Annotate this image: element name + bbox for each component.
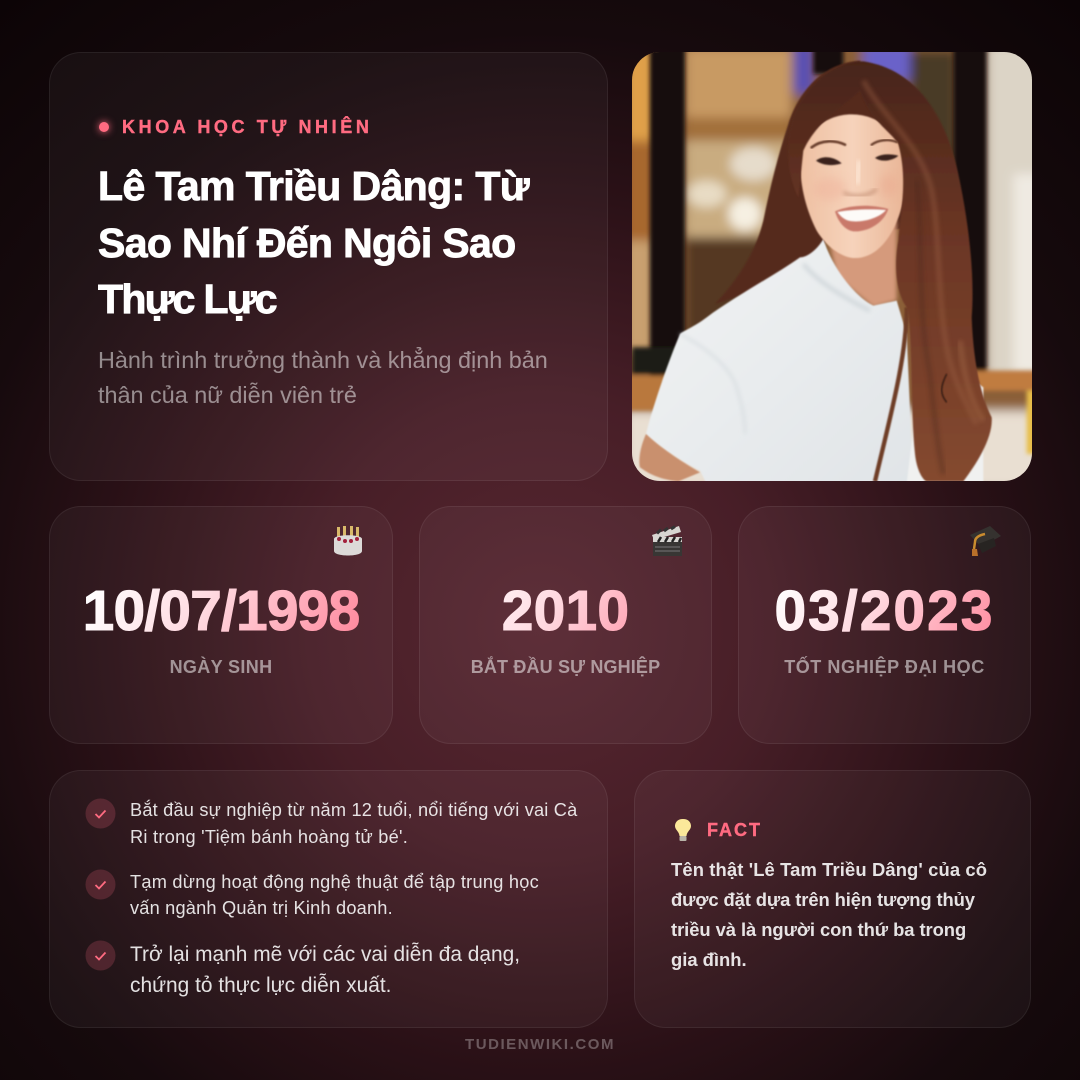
subtitle — [98, 347, 548, 408]
bullet 3: chứng tỏ thực lực diễn xuất. — [130, 974, 391, 997]
stat value: career start — [419, 579, 712, 643]
fact text: gia đình. — [671, 949, 747, 970]
neck — [827, 221, 897, 307]
fact text: Tên thật 'Lê Tam Triều Dâng' của cô — [671, 859, 987, 880]
bullet 1: Bắt đầu sự nghiệp từ năm 12 tuổi, nổi tiếng với vai Cà — [130, 800, 577, 820]
bullet 1: Ri trong 'Tiệm bánh hoàng tử bé'. — [130, 827, 408, 847]
panel: birth date stat — [49, 506, 393, 744]
shirt — [646, 239, 913, 484]
icon: check — [86, 870, 116, 900]
fact heading: FACT — [707, 820, 762, 840]
stat label: graduation: TỐT NGHIỆP ĐẠI HỌC — [784, 657, 985, 677]
panel: fact — [634, 770, 1031, 1028]
fact text — [671, 859, 987, 970]
mouth — [835, 206, 888, 231]
title: Lê Tam Triều Dâng: Từ — [98, 163, 529, 209]
panel: title card — [49, 52, 608, 481]
bullet 2: Tạm dừng hoạt động nghệ thuật để tập trung học — [130, 872, 539, 892]
hair behind — [715, 61, 913, 304]
bullet 3: Trở lại mạnh mẽ với các vai diễn đa dạng, — [130, 943, 520, 966]
footer brand: TUDIENWIKI.COM — [465, 1036, 615, 1053]
icon: check — [86, 940, 116, 970]
hair top and long right side — [788, 61, 992, 481]
icon: clapperboard — [652, 526, 682, 556]
panel: career start stat — [419, 506, 712, 744]
title — [98, 163, 530, 322]
arm — [639, 434, 700, 481]
brows — [812, 141, 845, 147]
fact text: được đặt dựa trên hiện tượng thủy — [671, 889, 975, 910]
stat label: birth date: NGÀY SINH — [170, 657, 272, 677]
icon: light bulb — [675, 819, 691, 841]
photo: smiling actress in white shirt — [632, 52, 1032, 481]
face — [800, 114, 905, 258]
category tag: KHOA HỌC TỰ NHIÊN — [122, 117, 372, 137]
bullet 3 — [86, 940, 520, 997]
bullet 2: vấn ngành Quản trị Kinh doanh. — [130, 898, 393, 918]
fact text: triều và là người con thứ ba trong — [671, 919, 966, 940]
stat value: career start: 2010 — [502, 579, 629, 643]
icon: check — [86, 798, 116, 828]
icon: birthday cake — [334, 526, 362, 556]
subtitle: thân của nữ diễn viên trẻ — [98, 382, 357, 408]
eyes — [816, 157, 842, 165]
bullet 1 — [86, 798, 578, 847]
bullet 2 — [86, 870, 539, 918]
title: Sao Nhí Đến Ngôi Sao — [98, 220, 516, 266]
subtitle: Hành trình trưởng thành và khẳng định bản — [98, 347, 548, 373]
strap — [875, 307, 907, 481]
panel: graduation stat — [738, 506, 1031, 744]
title: Thực Lực — [98, 276, 276, 322]
background — [623, 41, 1043, 491]
stat label: career start: BẮT ĐẦU SỰ NGHIỆP — [471, 657, 660, 677]
stat value: birth date: 10/07/1998 — [83, 579, 359, 643]
icon: graduation cap — [970, 526, 1001, 556]
stat value: graduation: 03/2023 — [774, 579, 995, 643]
panel: key points — [49, 770, 608, 1028]
nose — [843, 189, 877, 196]
